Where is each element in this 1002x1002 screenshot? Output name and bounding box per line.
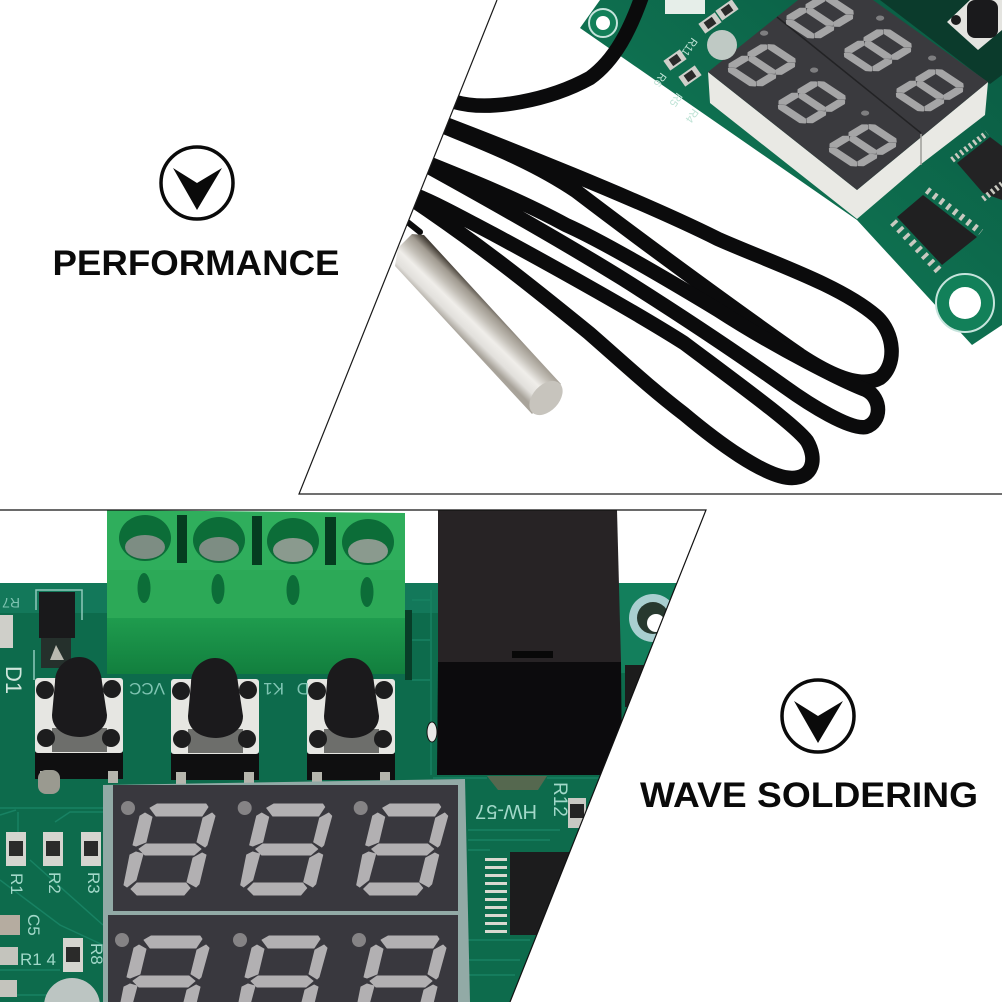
silkscreen labels: lower: R3: [84, 872, 103, 894]
silkscreen labels: lower: HW-57: [475, 800, 537, 822]
label: performance: PERFORMANCE: [52, 244, 340, 283]
circuit board: front view: [0, 583, 720, 1002]
silkscreen labels: [654, 38, 699, 123]
silkscreen labels: lower: R1 4: [20, 950, 56, 969]
icon: performance chevron: [161, 147, 233, 219]
steel probe: [395, 234, 569, 421]
silkscreen labels: lower: R8: [87, 943, 106, 965]
LED and resistors: [707, 30, 737, 60]
mounting hole: [625, 594, 670, 707]
icon: wave soldering chevron: [782, 680, 854, 752]
mounting holes: [936, 274, 994, 332]
panel outline: performance: [299, 0, 1002, 494]
silkscreen labels: upper: R7: [2, 595, 20, 611]
display module: [708, 72, 988, 219]
heading: performance: [52, 147, 340, 283]
silkscreen labels: lower: R2: [45, 872, 64, 894]
trace lines: [0, 590, 600, 995]
diode: [34, 590, 82, 680]
sensor cable: [405, 0, 892, 478]
resistor R7: [0, 615, 13, 648]
heading: wave soldering: [640, 680, 978, 815]
silkscreen labels: R5: [666, 90, 684, 109]
silkscreen labels: lower: C5: [24, 914, 43, 936]
panel: performance photo: [395, 0, 1002, 478]
silkscreen labels: lower: R1: [7, 873, 26, 895]
silkscreen labels: R11: [678, 35, 699, 58]
silkscreen labels: upper: [1, 595, 309, 698]
silkscreen labels: lower: [7, 782, 570, 969]
silkscreen labels: upper: D1: [1, 666, 26, 694]
LED displays: [103, 779, 470, 1002]
white solder blob: [427, 722, 437, 742]
silkscreen labels: lower: R12: [549, 782, 570, 817]
silkscreen labels: R6: [650, 70, 668, 89]
push buttons: [35, 657, 395, 784]
panel outline: wave soldering: [0, 510, 706, 1002]
silkscreen labels: upper: D: [297, 679, 309, 698]
label: wave soldering: WAVE SOLDERING: [640, 776, 978, 815]
push button: [947, 0, 1002, 50]
terminal block: [107, 510, 412, 680]
silkscreen labels: R4: [682, 106, 700, 125]
relay: [437, 510, 622, 790]
panel: wave soldering photo: [0, 510, 720, 1002]
board chip: [496, 852, 580, 936]
smd resistors: [0, 770, 586, 1002]
chips: [897, 195, 977, 265]
circuit board: top view: [580, 0, 1002, 345]
silkscreen labels: upper: K1: [263, 679, 284, 698]
silkscreen labels: upper: VCC: [129, 679, 165, 698]
